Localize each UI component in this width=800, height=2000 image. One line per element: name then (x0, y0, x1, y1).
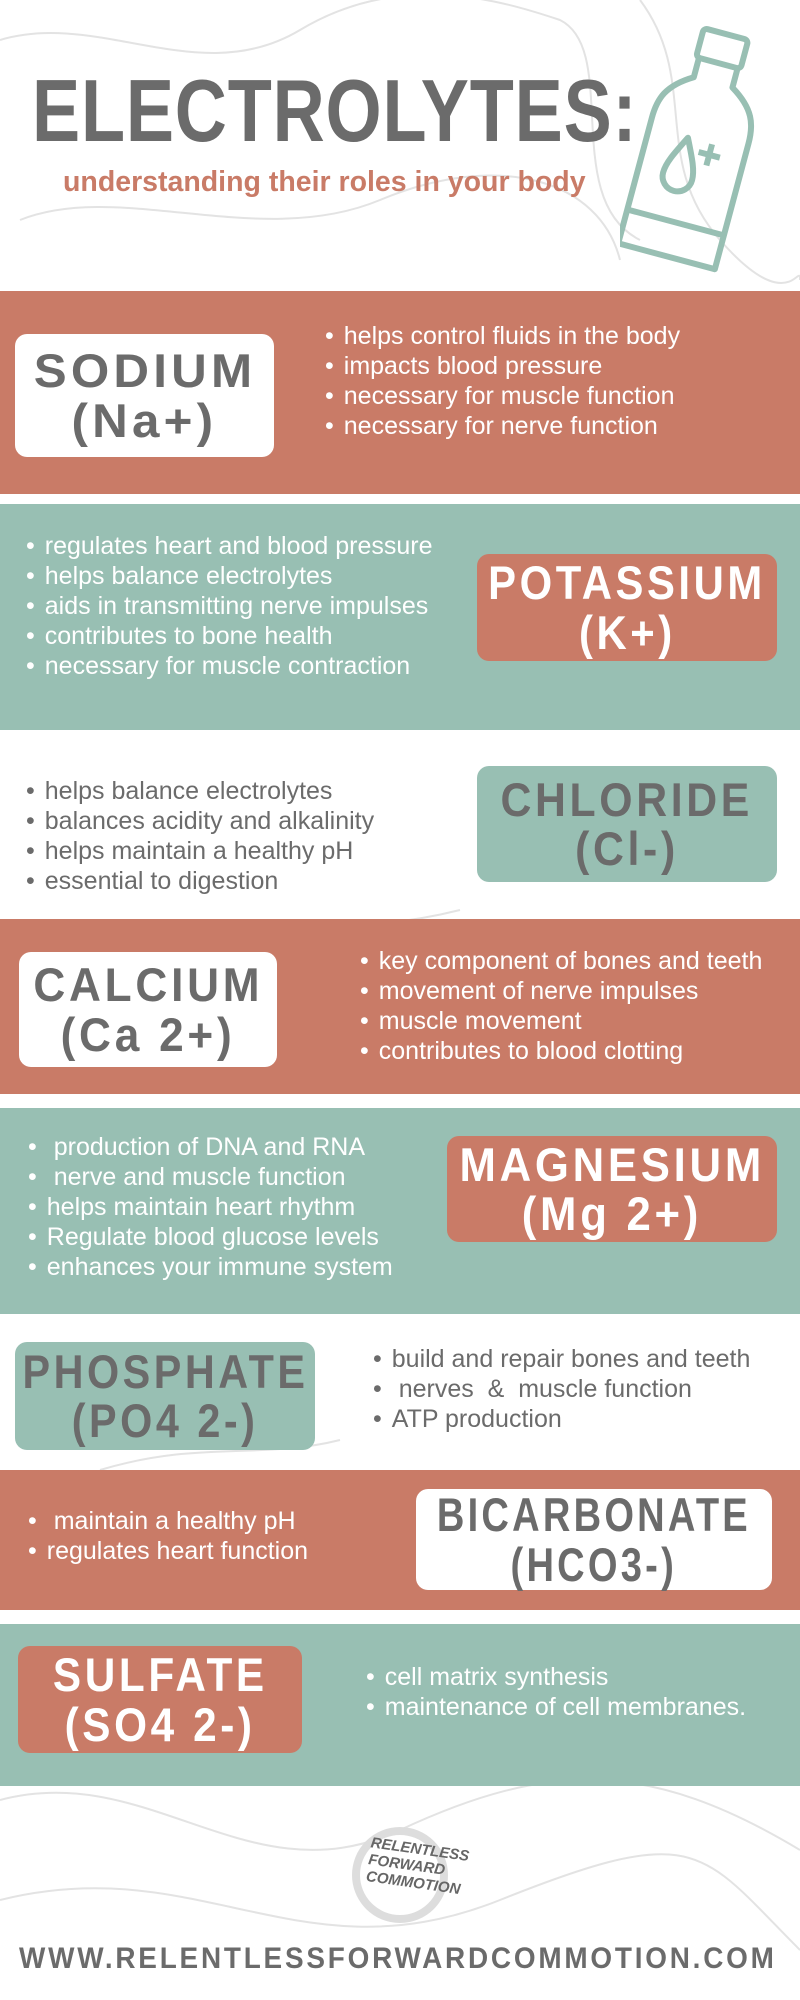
text: magnesium roles: enhances your immune system (47, 1253, 393, 1281)
text: sodium roles: impacts blood pressure (344, 352, 602, 380)
panel: bicarbonate (0, 1470, 800, 1610)
logo: RELENTLESS (370, 1834, 470, 1865)
heading: sulfate (18, 1646, 302, 1753)
logo (352, 1827, 470, 1923)
text: potassium roles (27, 532, 433, 680)
heading: chloride (477, 766, 777, 882)
panel: sodium (0, 291, 800, 494)
title: ELECTROLYTES: (32, 61, 637, 160)
heading: calcium (19, 952, 277, 1067)
text: phosphate roles: nerves & muscle function (399, 1375, 692, 1403)
panel: magnesium (0, 1108, 800, 1314)
text: bicarbonate roles: maintain a healthy pH (54, 1507, 296, 1535)
text: chloride roles: helps balance electrolytes (45, 777, 332, 805)
heading: potassium: (K+) (579, 606, 675, 658)
text: magnesium roles (29, 1133, 393, 1281)
text: phosphate roles: ATP production (392, 1405, 562, 1433)
text: calcium roles (361, 947, 762, 1065)
text: potassium roles: contributes to bone health (45, 622, 332, 650)
text: phosphate roles: build and repair bones and teeth (392, 1345, 750, 1373)
panel: calcium (0, 919, 800, 1094)
heading: potassium (477, 554, 777, 661)
text: sodium roles: helps control fluids in the body (344, 322, 680, 350)
text: chloride roles: essential to digestion (45, 867, 278, 895)
text: sulfate roles: cell matrix synthesis (385, 1663, 608, 1691)
heading: phosphate: PHOSPHATE (22, 1345, 308, 1398)
text: magnesium roles: Regulate blood glucose levels (47, 1223, 379, 1251)
footer url: WWW.RELENTLESSFORWARDCOMMOTION.COM (19, 1942, 777, 1975)
text: calcium roles: contributes to blood clotting (379, 1037, 683, 1065)
heading: bicarbonate: (HCO3-) (511, 1538, 677, 1590)
text: potassium roles: regulates heart and blood pressure (45, 532, 433, 560)
text: calcium roles: muscle movement (379, 1007, 582, 1035)
panel: sulfate (0, 1624, 800, 1786)
text: calcium roles: movement of nerve impulses (379, 977, 698, 1005)
heading: chloride: (Cl-) (575, 822, 679, 875)
heading: calcium: CALCIUM (33, 958, 263, 1011)
text: potassium roles: helps balance electrolytes (45, 562, 332, 590)
heading: calcium: (Ca 2+) (61, 1008, 235, 1060)
heading: magnesium (447, 1136, 777, 1242)
heading: sulfate: (SO4 2-) (65, 1698, 255, 1750)
text: phosphate roles (374, 1345, 750, 1433)
heading: phosphate: (PO4 2-) (72, 1394, 258, 1447)
text: chloride roles: balances acidity and alkalinity (45, 807, 374, 835)
panel: chloride (27, 766, 777, 895)
heading: magnesium: (Mg 2+) (522, 1187, 702, 1240)
icon: bottle (620, 26, 754, 272)
text: sodium roles: necessary for muscle function (344, 382, 674, 410)
logo: FORWARD (367, 1851, 446, 1879)
heading: bicarbonate: BICARBONATE (437, 1488, 751, 1541)
text: bicarbonate roles: regulates heart function (47, 1537, 308, 1565)
text: magnesium roles: helps maintain heart rhythm (47, 1193, 355, 1221)
text: sulfate roles (367, 1663, 746, 1721)
text: calcium roles: key component of bones and teeth (379, 947, 762, 975)
panel: phosphate (15, 1342, 750, 1450)
text: sulfate roles: maintenance of cell membranes. (385, 1693, 746, 1721)
text: magnesium roles: production of DNA and RNA (54, 1133, 365, 1161)
text: sodium roles (326, 322, 680, 440)
heading: sodium (15, 334, 274, 457)
heading: sulfate: SULFATE (53, 1648, 267, 1701)
text: chloride roles: helps maintain a healthy pH (45, 837, 353, 865)
panel: potassium (0, 504, 800, 730)
heading: phosphate (15, 1342, 315, 1450)
text: bicarbonate roles (29, 1507, 308, 1565)
subtitle: understanding their roles in your body (63, 166, 586, 198)
heading: chloride: CHLORIDE (501, 773, 753, 826)
heading: sodium: SODIUM (33, 344, 256, 397)
heading: bicarbonate (416, 1489, 772, 1590)
heading: sodium: (Na+) (72, 394, 217, 446)
heading: magnesium: MAGNESIUM (459, 1138, 765, 1191)
text: chloride roles (27, 777, 374, 895)
text: potassium roles: aids in transmitting nerve impulses (45, 592, 428, 620)
logo: COMMOTION (365, 1868, 461, 1898)
text: sodium roles: necessary for nerve function (344, 412, 658, 440)
heading: potassium: POTASSIUM (488, 556, 766, 609)
text: magnesium roles: nerve and muscle function (54, 1163, 346, 1191)
text: potassium roles: necessary for muscle contraction (45, 652, 410, 680)
